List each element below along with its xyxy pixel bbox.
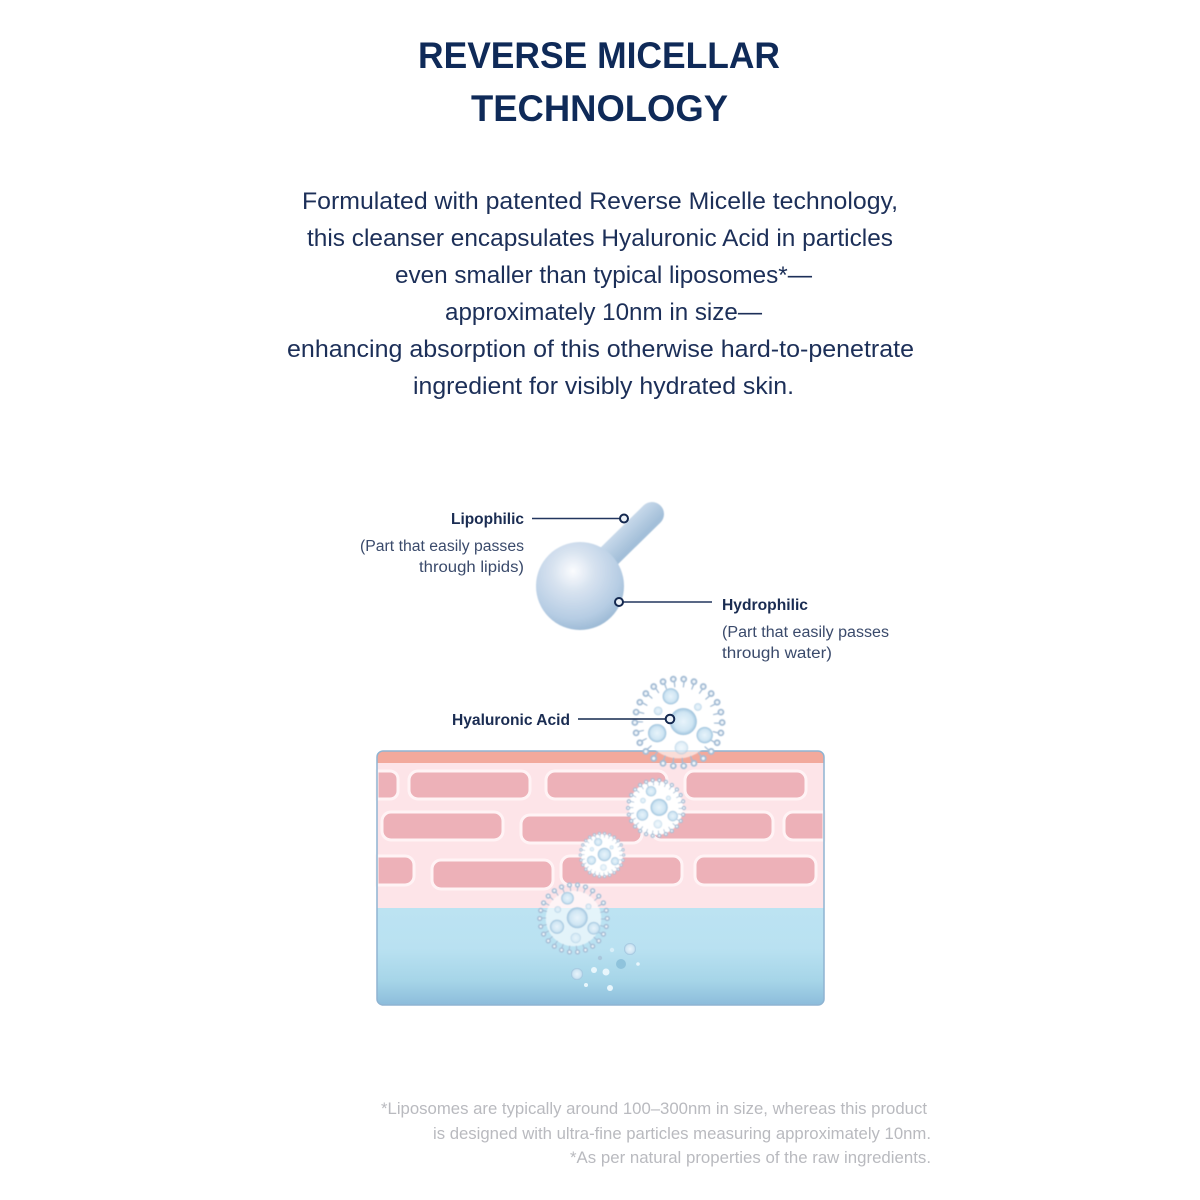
description text block: even smaller than typical liposomes*— (395, 262, 812, 289)
label line: hydrophilic (615, 598, 712, 606)
micelle molecule diagram (360, 511, 889, 662)
label: hydrophilic (722, 597, 889, 662)
label line: lipophilic (532, 514, 628, 522)
icon: molecule tail (600, 514, 652, 565)
particle: entering skin (635, 679, 722, 766)
footnote: *As per natural properties of the raw ingredients. (570, 1149, 931, 1167)
title: TECHNOLOGY (471, 88, 728, 129)
skin base (377, 751, 824, 1005)
callout: hyaluronic acid: Hyaluronic Acid (452, 712, 570, 729)
description text block: ingredient for visibly hydrated skin. (413, 373, 794, 400)
description text block: Formulated with patented Reverse Micelle technology, (302, 188, 898, 215)
label: lipophilic: through lipids) (419, 559, 524, 576)
label: lipophilic (360, 511, 524, 576)
label: lipophilic: (Part that easily passes (360, 538, 524, 555)
callout: hyaluronic acid (452, 712, 674, 729)
description text block: approximately 10nm in size— (445, 299, 762, 326)
label: hydrophilic: (Part that easily passes (722, 624, 889, 641)
label: hydrophilic: Hydrophilic (722, 597, 808, 614)
description text block: this cleanser encapsulates Hyaluronic Acid in particles (307, 225, 893, 252)
particle: in middle skin layer (580, 833, 624, 877)
water layer (377, 908, 824, 1005)
skin surface stripe (377, 751, 824, 763)
particle: dissolving at water layer (540, 885, 607, 952)
particle: in upper skin layer (628, 780, 684, 836)
title (418, 35, 780, 129)
description text block (287, 188, 914, 400)
icon: molecule head (536, 542, 624, 630)
description text block: enhancing absorption of this otherwise hard-to-penetrate (287, 336, 914, 363)
footnote (381, 1100, 931, 1167)
skin cell bricks (377, 771, 824, 889)
title: REVERSE MICELLAR (418, 35, 780, 76)
skin cross-section panel (377, 751, 824, 1005)
label: hydrophilic: through water) (722, 645, 832, 662)
footnote: *Liposomes are typically around 100–300nm in size, whereas this product (381, 1100, 927, 1118)
released hyaluronic acid droplets (571, 943, 640, 991)
panel border (377, 751, 824, 1005)
label: lipophilic: Lipophilic (451, 511, 524, 528)
footnote: is designed with ultra-fine particles measuring approximately 10nm. (433, 1125, 931, 1143)
